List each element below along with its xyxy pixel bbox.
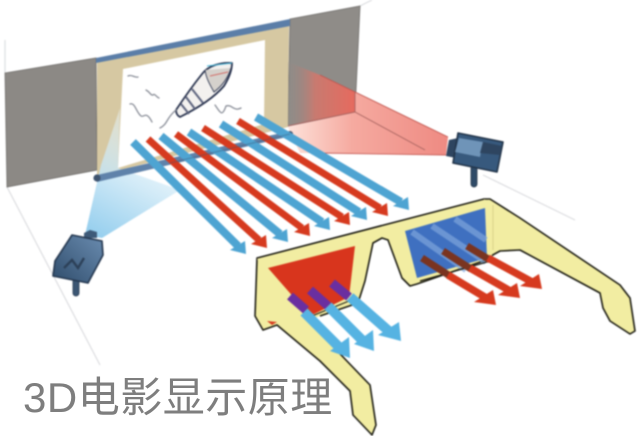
screen frame <box>97 26 289 176</box>
rocket image on screen <box>176 63 232 117</box>
brown arrow segments in right lens <box>422 246 490 276</box>
right projector <box>446 133 503 187</box>
red arrow 1 <box>148 139 267 248</box>
right lens light stripes <box>412 219 486 270</box>
squiggle smoke lines <box>128 75 241 128</box>
cinema screen <box>96 19 290 176</box>
bar shadow through arrows <box>170 134 290 163</box>
bottom screen bar <box>93 131 293 182</box>
polarized light arrows <box>133 117 409 254</box>
room floor lines <box>5 0 575 365</box>
lens edge lines <box>307 262 487 318</box>
red arrow 2 <box>176 134 310 236</box>
blue arrow 5 <box>256 117 409 210</box>
blue arrow 2 <box>161 136 288 242</box>
left gray wall <box>5 58 97 187</box>
left temple arm <box>255 258 376 435</box>
blue arrow 4 <box>221 124 367 220</box>
top screen bar <box>96 19 290 63</box>
red arrow 3 <box>203 128 350 225</box>
blue arrows past left lens <box>304 297 401 358</box>
screen surface <box>118 40 265 168</box>
blue projection beam <box>85 108 180 238</box>
red projection beam <box>288 62 448 155</box>
glasses front frame <box>257 199 493 324</box>
red arrows past right lens <box>448 258 542 305</box>
red arrow 4 <box>238 121 388 216</box>
blue arrow 1 <box>133 142 246 254</box>
right blue lens <box>405 208 487 278</box>
right gray wall <box>288 6 360 126</box>
right temple arm <box>480 199 635 334</box>
title: 3D电影显示原理 <box>23 374 333 421</box>
blue arrow 3 <box>189 132 330 230</box>
left projector <box>53 230 103 296</box>
left red lens <box>268 246 355 316</box>
3D glasses <box>255 199 635 435</box>
purple arrow segments in left lens <box>290 283 349 310</box>
hinge red detail <box>267 321 277 325</box>
